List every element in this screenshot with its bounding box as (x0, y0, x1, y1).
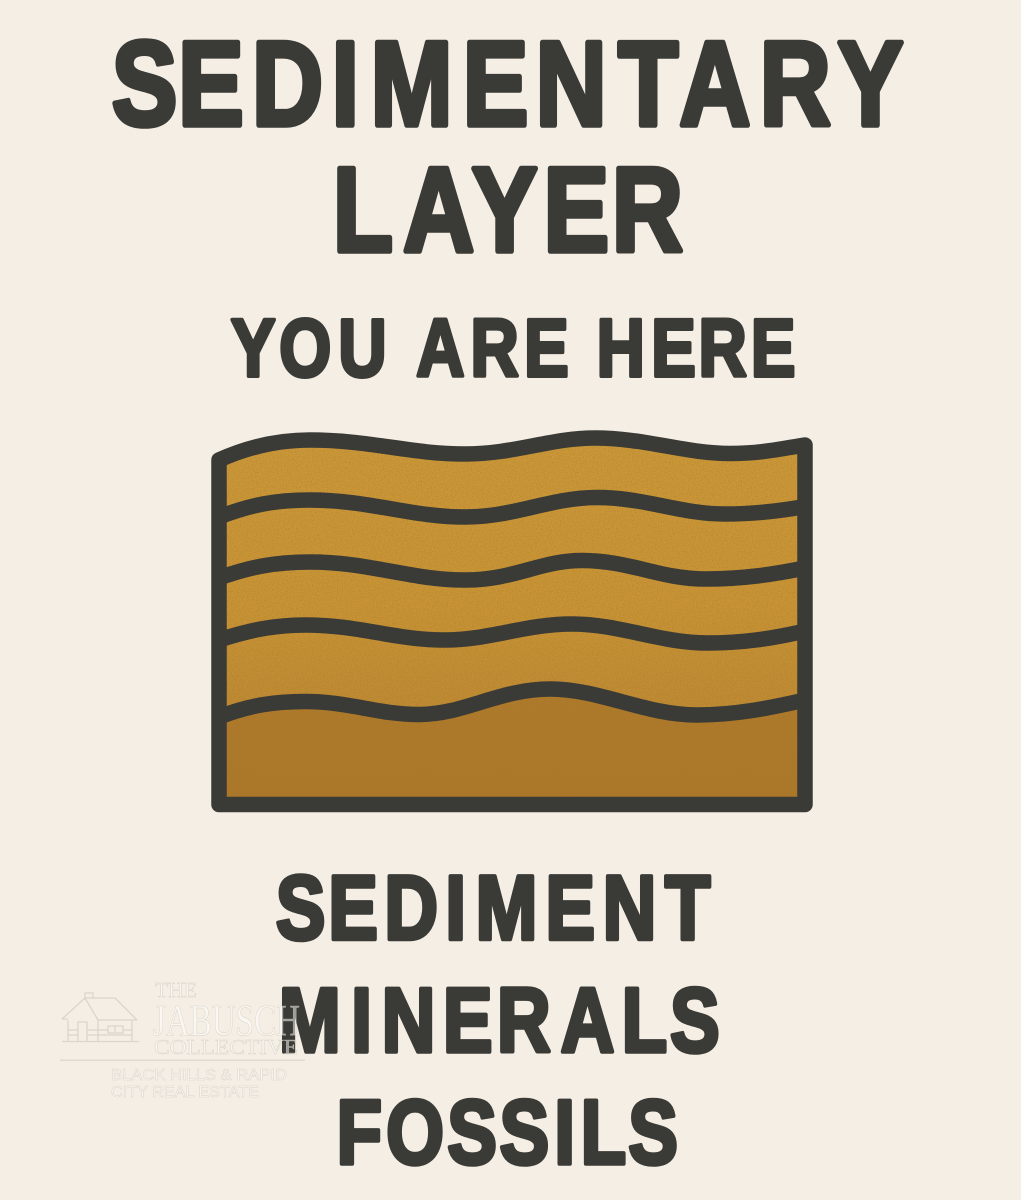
title: LAYER (333, 144, 683, 277)
label list: MINERALS (279, 969, 720, 1071)
layer boundary lines (219, 498, 805, 717)
watermark logo: CITY REAL ESTATE (111, 1084, 259, 1101)
title (112, 18, 903, 277)
watermark logo: COLLECTIVE (154, 1035, 298, 1059)
upper sediment bands (219, 438, 805, 805)
watermark logo (60, 978, 305, 1101)
watermark logo: BLACK HILLS & RAPID (111, 1067, 287, 1084)
bottom dark sediment band (219, 689, 805, 805)
label list: SEDIMENT (276, 857, 710, 959)
label list: FOSSILS (337, 1081, 678, 1183)
diagram outline (219, 438, 805, 804)
watermark text: THE (155, 978, 197, 1002)
title: SEDIMENTARY (112, 18, 903, 151)
watermark logo: JABUSCH (153, 996, 300, 1045)
diagram: sediment layers (219, 438, 805, 805)
subtitle: you are here: YOU ARE HERE (231, 303, 795, 393)
label list (276, 857, 720, 1183)
grain texture (219, 438, 805, 805)
icon: house (62, 993, 139, 1042)
